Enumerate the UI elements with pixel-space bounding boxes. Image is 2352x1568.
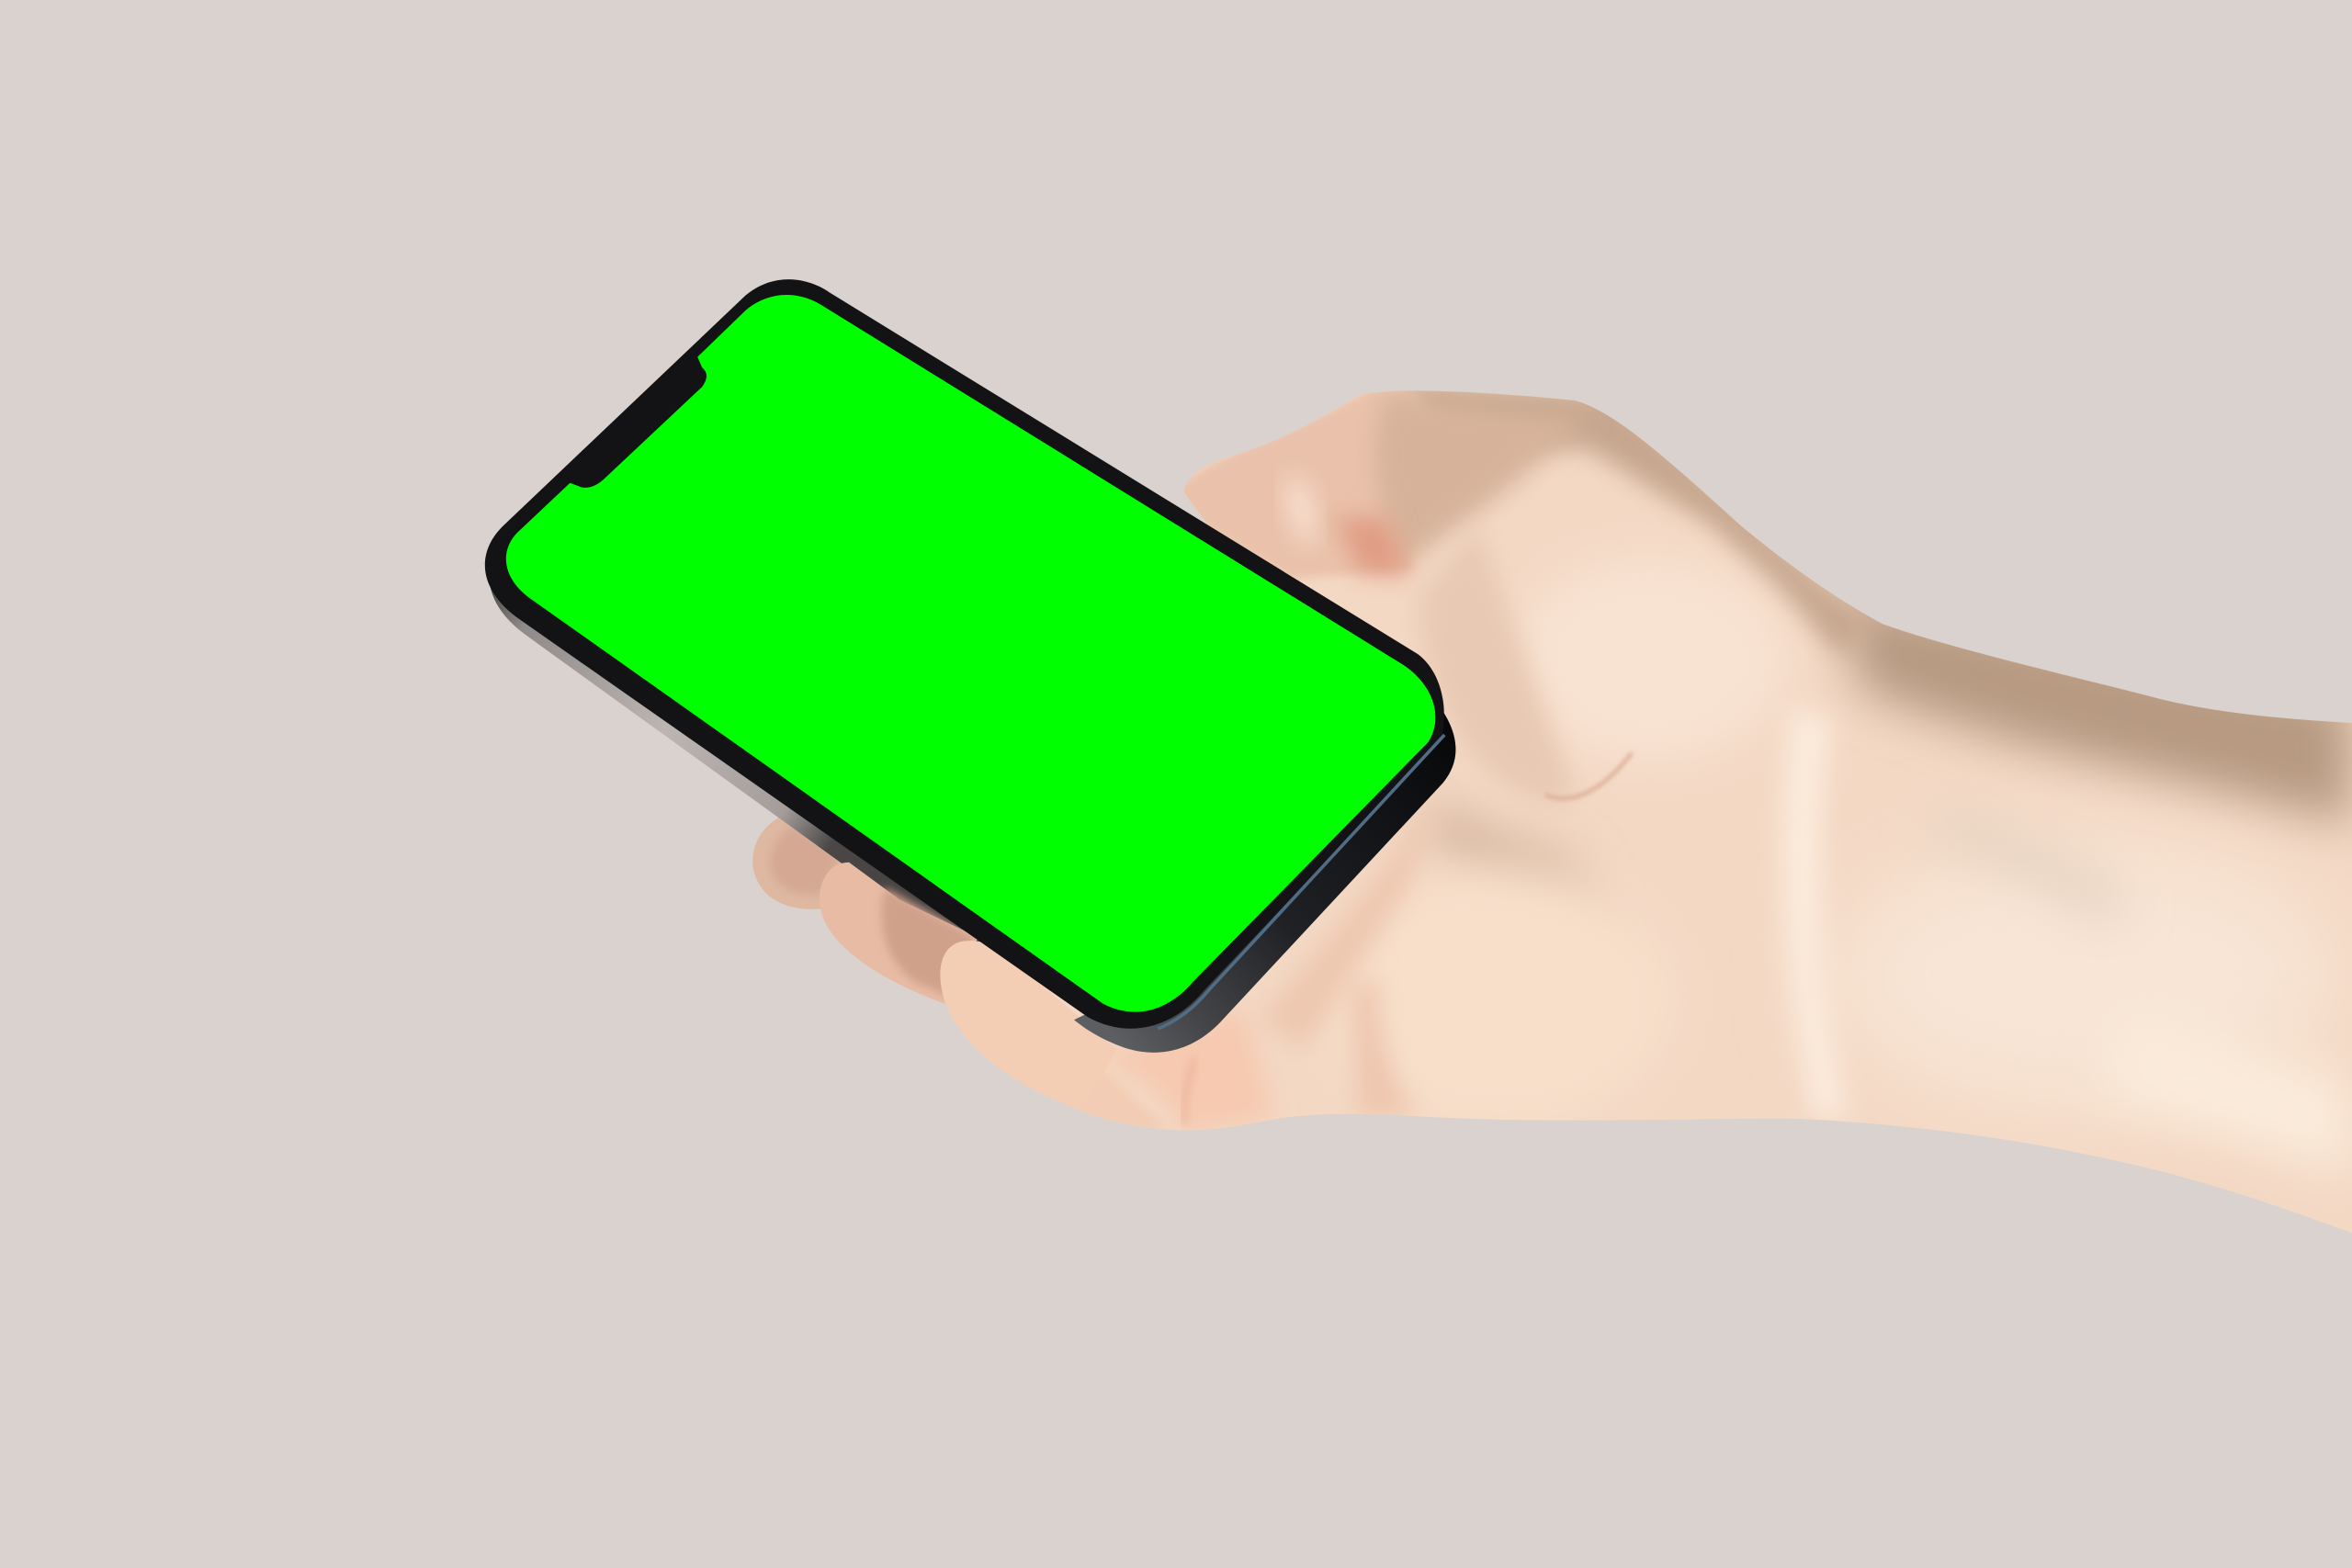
- forearm top shadow: [1838, 592, 2352, 825]
- middle finger: [820, 863, 978, 1005]
- phone glass bezel: [485, 279, 1444, 1029]
- scene: hand holding phone: [485, 279, 2352, 1233]
- lower palm: [1439, 846, 1638, 1003]
- green screen: [506, 295, 1435, 1012]
- index finger tip over phone side: [940, 941, 1117, 1110]
- skin base: [1029, 392, 2352, 1233]
- under-thumb palm patch: [1320, 561, 1418, 648]
- back fingers: [752, 561, 1418, 909]
- base of index finger: [1079, 1073, 1161, 1128]
- phone side wall: [489, 450, 1410, 1045]
- phone lower-right edge: [1074, 697, 1455, 1053]
- thumb: [1183, 391, 1408, 581]
- fist shadow under thumb base: [1426, 796, 1589, 890]
- ring finger: [752, 810, 885, 909]
- palm crease: [1545, 753, 1632, 798]
- palm highlight: [1528, 562, 1796, 757]
- phone blue edge highlight: [1158, 735, 1444, 1029]
- middle finger shading: [882, 888, 975, 998]
- wrist creases and highlights: [1781, 705, 1848, 1117]
- hand: [1029, 390, 2352, 1233]
